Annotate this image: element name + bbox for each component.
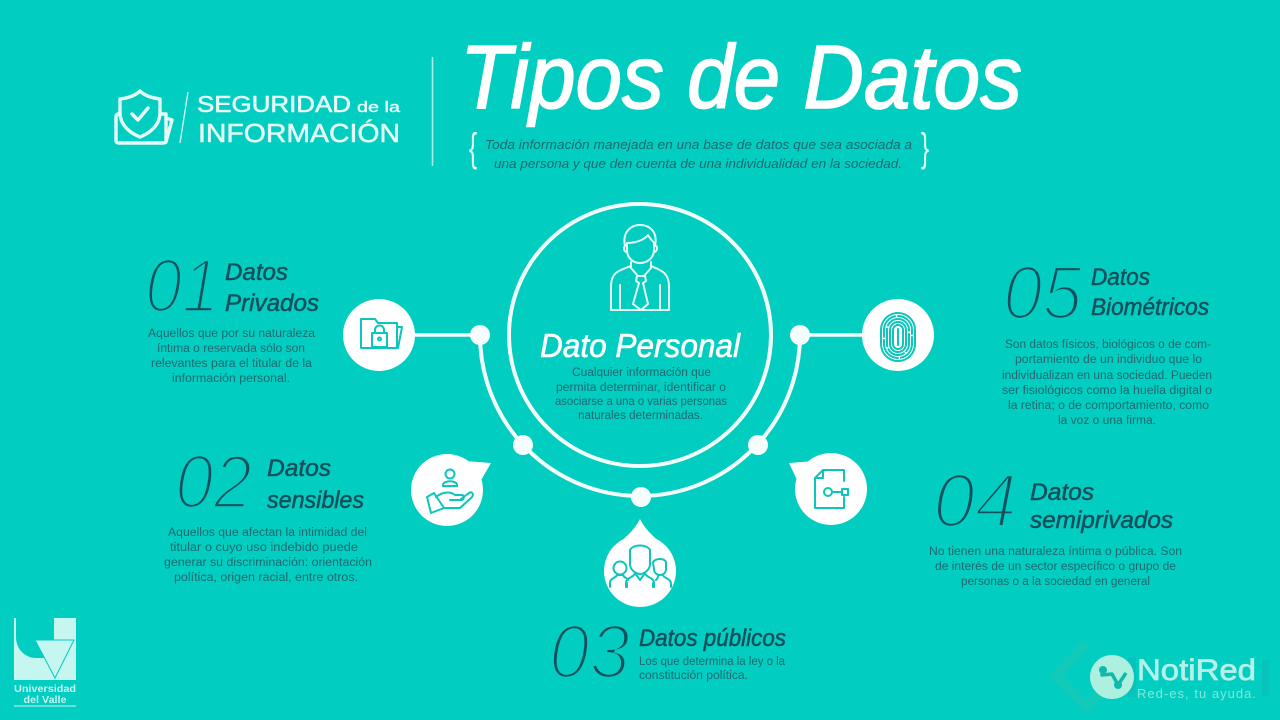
central heading: Dato Personal <box>540 327 742 364</box>
central description: permita determinar, identificar o <box>556 382 726 394</box>
logo text: de la <box>357 99 401 116</box>
section 04: Datos semiprivados: No tienen una naturaleza íntima o pública. Son <box>929 546 1182 558</box>
icon: document with key <box>789 453 867 525</box>
section 05: Datos Biométricos: la retina; o de comportamiento, como <box>1008 400 1209 412</box>
watermark logo: NotiRed: Red-es, tu ayuda. <box>1137 686 1256 701</box>
section 01: Datos Privados <box>145 244 319 385</box>
section 05: Datos Biométricos: Son datos físicos, biológicos o de com- <box>1005 339 1211 351</box>
section 01: Datos Privados: Datos <box>225 259 288 286</box>
central circle: Dato Personal <box>509 204 771 466</box>
icon: group of people <box>604 519 676 607</box>
subtitle with braces: una persona y que den cuenta de una individualidad en la sociedad. <box>494 156 902 171</box>
section 02: Datos sensibles: Aquellos que afectan la intimidad del <box>168 527 367 539</box>
logo text <box>197 91 401 148</box>
central description <box>555 367 727 422</box>
subtitle with braces: { <box>469 126 477 171</box>
section 02: Datos sensibles: política, origen racial, entre otros. <box>174 572 358 584</box>
section 02: Datos sensibles: sensibles <box>267 487 364 514</box>
icon: man with tie <box>611 225 669 310</box>
logo text: INFORMACIÓN <box>198 118 400 148</box>
section 05: Datos Biométricos: Datos <box>1091 264 1150 291</box>
section 02: Datos sensibles: Datos <box>267 455 331 482</box>
icon: folder with lock <box>343 299 415 371</box>
section 04: Datos semiprivados: semiprivados <box>1030 507 1173 534</box>
watermark logo: NotiRed <box>1056 643 1269 707</box>
logo: Universidad del Valle: Universidad <box>14 683 76 695</box>
subtitle with braces: Toda información manejada en una base de datos que sea asociada a <box>485 137 912 152</box>
section 05: Datos Biométricos <box>1002 251 1212 427</box>
section 05: Datos Biométricos: ser fisiológicos como la huella digital o <box>1002 385 1212 397</box>
section 03: Datos públicos: constitución política. <box>639 670 748 682</box>
icon: hand holding person <box>411 454 491 526</box>
section 04: Datos semiprivados: personas o a la sociedad en general <box>961 576 1150 588</box>
slash divider <box>180 92 188 143</box>
logo text: SEGURIDAD <box>197 91 351 117</box>
central description: naturales determinadas. <box>578 410 703 422</box>
section 04: Datos semiprivados <box>929 459 1182 588</box>
icon: shield with check <box>116 91 172 143</box>
section 01: Datos Privados: íntima o reservada sólo son <box>157 343 305 355</box>
section 05: Datos Biométricos: la voz o una firma. <box>1058 415 1156 427</box>
section 05: Datos Biométricos: individualizan en una sociedad. Pueden <box>1002 370 1212 382</box>
section 01: Datos Privados: Aquellos que por su naturaleza <box>148 328 316 340</box>
icon: fingerprint <box>862 299 934 371</box>
section 03: Datos públicos: Los que determina la ley o la <box>639 656 786 668</box>
section 03: Datos públicos: Datos públicos <box>639 625 786 652</box>
section 01: Datos Privados: relevantes para el titular de la <box>151 358 313 370</box>
title: Tipos de Datos <box>460 28 1022 128</box>
section 02: Datos sensibles: generar su discriminación: orientación <box>164 557 372 569</box>
section 04: Datos semiprivados: Datos <box>1030 479 1094 506</box>
central description: asociarse a una o varias personas <box>555 396 727 408</box>
section 03: Datos públicos <box>549 610 786 695</box>
subtitle with braces <box>469 126 929 171</box>
section 03: Datos públicos: 03 <box>549 610 630 695</box>
section 02: Datos sensibles: 02 <box>175 440 252 525</box>
header logo: Seguridad de la Información <box>116 91 401 148</box>
section 02: Datos sensibles: titular o cuyo uso indebido puede <box>170 542 358 554</box>
watermark logo: NotiRed: NotiRed <box>1137 654 1256 687</box>
section 05: Datos Biométricos: Biométricos <box>1091 294 1209 321</box>
section 01: Datos Privados: información personal. <box>172 373 290 385</box>
section 05: Datos Biométricos: 05 <box>1003 251 1083 336</box>
section 01: Datos Privados: Privados <box>225 290 319 317</box>
section 01: Datos Privados: 01 <box>145 244 219 329</box>
section 02: Datos sensibles <box>164 440 372 584</box>
subtitle with braces: } <box>921 126 929 171</box>
header vertical divider <box>432 57 434 166</box>
logo: Universidad del Valle: del Valle <box>24 694 67 706</box>
logo: Universidad del Valle <box>14 618 76 706</box>
section 05: Datos Biométricos: portamiento de un individuo que lo <box>1015 354 1202 366</box>
section 04: Datos semiprivados: de interés de un sector específico o grupo de <box>935 561 1176 573</box>
section 04: Datos semiprivados: 04 <box>933 459 1017 544</box>
connector arc with nodes <box>410 325 870 507</box>
central description: Cualquier información que <box>572 367 711 379</box>
